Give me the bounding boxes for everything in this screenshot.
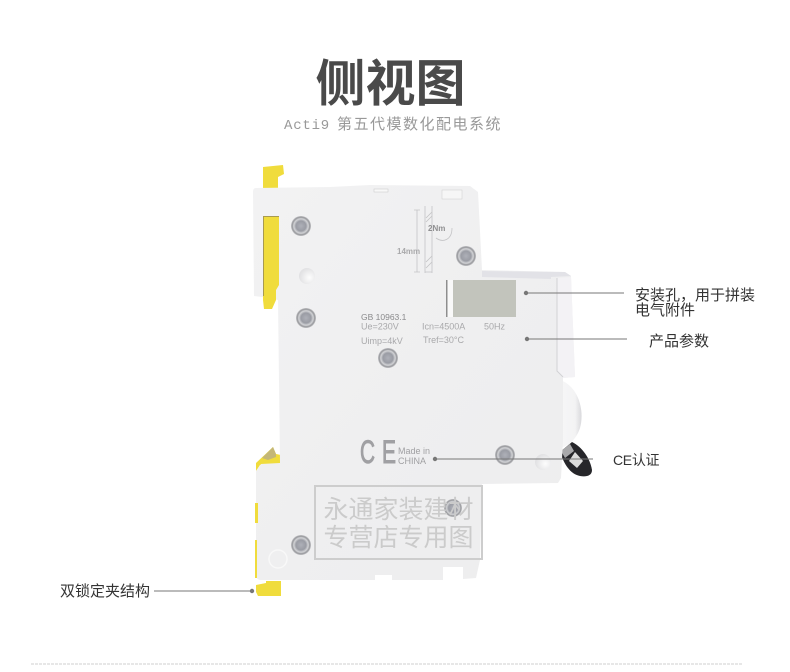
callout: CE certification: CE认证 [613,452,660,468]
gray window [446,280,516,317]
rating text: GB 10963.1 [361,312,407,322]
subtitle: 第五代模数化配电系统 [337,115,502,133]
rating text: Icn=4500A [422,322,465,332]
callout: CE certification [433,452,660,468]
rating text: 50Hz [484,322,506,332]
callout: double lock clip [60,583,254,600]
yellow strips lower side [255,503,258,523]
callout: product parameters: 产品参数 [649,333,709,350]
CE mark: C [360,434,375,470]
torque and size diagram [397,206,452,273]
rating text: Ue=230V [361,322,399,332]
rating text: Uimp=4kV [361,336,403,346]
callout: mounting hole: 安装孔，用于拼装 [635,287,755,304]
module body [253,185,575,580]
CE mark: Made in [398,446,430,456]
mounting holes [269,268,551,568]
right side edge shade [557,277,575,378]
bottom yellow foot [256,581,281,596]
top yellow clip tab [263,165,284,190]
callout: double lock clip: 双锁定夹结构 [60,583,150,600]
torque and size diagram: 14mm [397,247,420,256]
screws [291,216,515,555]
torque and size diagram: 2Nm [428,224,445,233]
lever dome [560,380,582,448]
toggle lever [560,442,592,476]
CE mark: E [382,434,396,470]
callout: product parameters [525,333,709,350]
subtitle [284,115,502,134]
CE mark [360,434,430,470]
callout: mounting hole: 电气附件 [635,302,695,319]
rating text: Tref=30°C [423,335,465,345]
callout: mounting hole [524,287,755,319]
yellow side slider [263,216,279,309]
CE mark: CHINA [398,456,426,466]
subtitle: Acti9 [284,118,330,134]
breaker side view [253,165,592,596]
title: 侧视图 [316,56,466,112]
rating text [361,312,506,346]
watermark: 永通家装建材 [323,496,474,524]
watermark [315,486,482,559]
top clip slot [374,189,388,192]
lower yellow clip back [256,447,281,471]
watermark: 专营店专用图 [323,524,474,552]
